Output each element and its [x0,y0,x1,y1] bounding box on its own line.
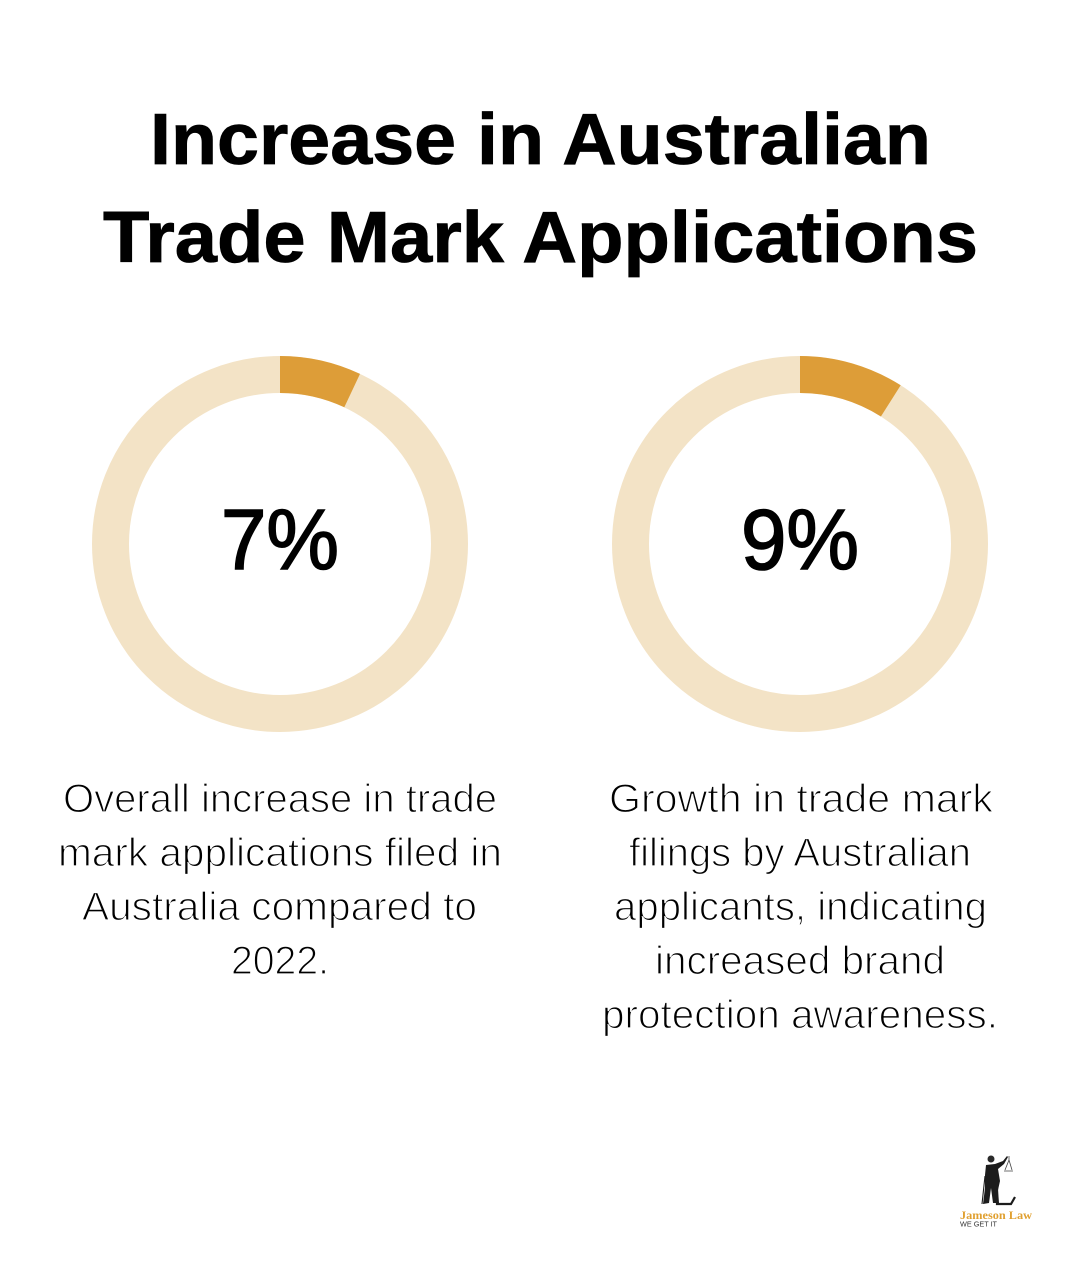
description: overall increase: Australia compared to [82,885,477,929]
donut chart: 9% [630,356,970,714]
description: overall increase: mark applications filed in [58,831,502,875]
description: overall increase [58,777,502,983]
title: Increase in Australian [150,100,931,180]
description: Australian applicants growth: applicants, indicating [614,885,987,929]
description: Australian applicants growth: Growth in trade mark [609,777,994,821]
panel: 7% statistic [58,356,502,983]
panel: 9% statistic [602,356,998,1037]
value: 7%: 7% [221,493,339,588]
value: 9%: 9% [741,493,859,588]
description: Australian applicants growth [602,777,998,1037]
icon: lady justice [982,1156,1015,1204]
brand name: Jameson Law [960,1210,1033,1222]
title [103,100,978,278]
tagline: WE GET IT [960,1222,998,1228]
description: Australian applicants growth: increased brand [655,939,945,983]
logo: Jameson Law [960,1156,1033,1228]
description: overall increase: 2022. [231,939,329,983]
description: overall increase: Overall increase in trade [63,777,497,821]
title: Trade Mark Applications [103,198,978,278]
donut chart: 7% [110,356,450,714]
description: Australian applicants growth: protection awareness. [602,993,998,1037]
description: Australian applicants growth: filings by Australian [629,831,971,875]
